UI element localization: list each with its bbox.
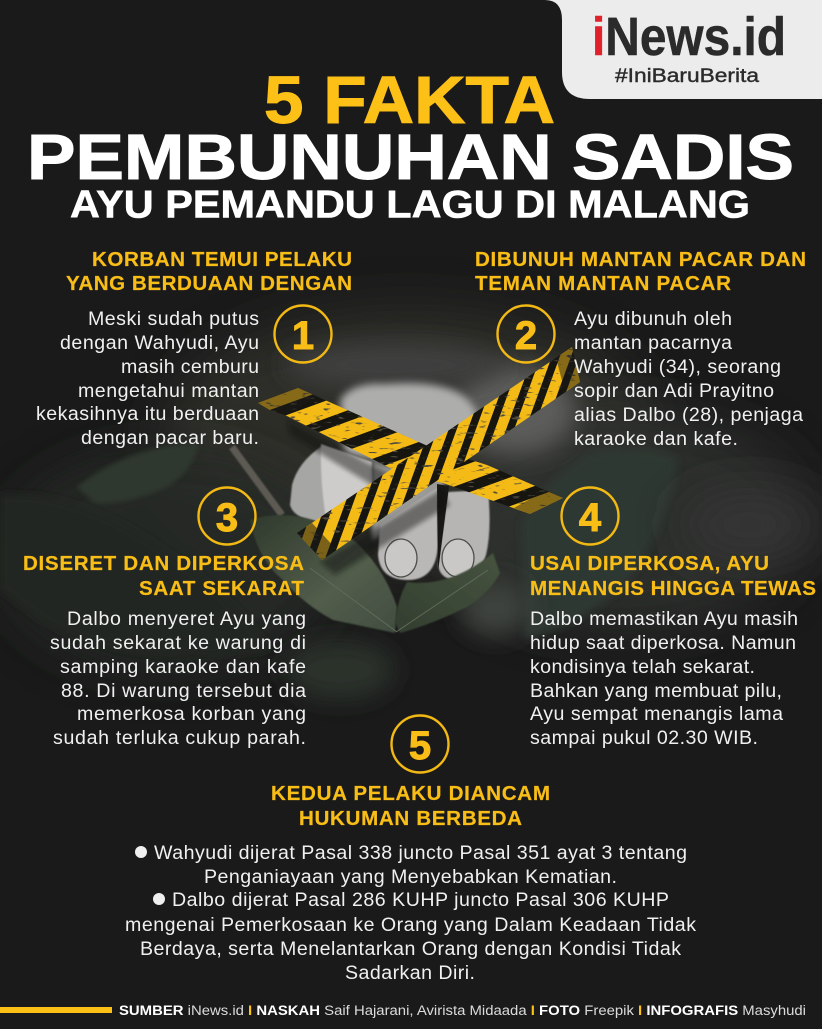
- heading 2: [475, 248, 806, 295]
- title: PEMBUNUHAN SADIS: [27, 121, 794, 193]
- fact 1: [36, 248, 352, 449]
- footer credits: SUMBER iNews.id I NASKAH Saif Hajarani, Avirista Midaada I FOTO Freepik I INFOGRAFIS Masyhudi: [119, 1003, 806, 1018]
- leaf: main right: [395, 553, 500, 633]
- hand: back of the hand: [340, 383, 480, 470]
- body 2: Wahyudi (34), seorang: [574, 356, 781, 378]
- body 4: kondisinya telah sekarat.: [530, 656, 755, 678]
- heading 5: KEDUA PELAKU DIANCAM: [271, 782, 550, 805]
- logo wordmark: iNews.id: [592, 7, 786, 67]
- body 2: alias Dalbo (28), penjaga: [574, 404, 803, 426]
- number badge 4: 4: [579, 496, 602, 540]
- body 4: [530, 608, 798, 749]
- number badge 3: [198, 488, 256, 544]
- hand: fingernails: [385, 539, 474, 577]
- body 3: sudah terluka cukup parah.: [53, 727, 306, 749]
- number badge 2: 2: [515, 314, 537, 358]
- fact 2: [475, 248, 806, 450]
- body 2: sopir dan Adi Prayitno: [574, 380, 774, 402]
- heading 5: [271, 782, 550, 830]
- number badge 4: [562, 488, 618, 544]
- body 2: Ayu dibunuh oleh: [574, 308, 732, 330]
- heading 1: [66, 248, 352, 295]
- body 1: mengetahui mantan: [78, 380, 259, 402]
- heading 1: KORBAN TEMUI PELAKU: [92, 248, 352, 271]
- tape: bottom-left to top-right: [297, 347, 580, 560]
- hand: folded fingers: [290, 446, 330, 522]
- heading 3: SAAT SEKARAT: [139, 577, 304, 600]
- body 3: [50, 608, 306, 749]
- fact 4: [530, 488, 816, 749]
- heading 2: TEMAN MANTAN PACAR: [475, 272, 731, 295]
- leaf: main left: [250, 515, 397, 633]
- body 5: mengenai Pemerkosaan ke Orang yang Dalam Keadaan Tidak: [125, 914, 696, 936]
- number badge 2: [498, 306, 554, 362]
- footer accent bar: [0, 1007, 112, 1013]
- body 5: [125, 842, 696, 984]
- body 1: [36, 308, 259, 449]
- blurred ambient foliage: [0, 310, 820, 700]
- tape: top-left to bottom-right: [258, 388, 563, 514]
- body 5: Dalbo dijerat Pasal 286 KUHP juncto Pasal 306 KUHP: [172, 889, 669, 911]
- photo: hand on leaves behind crime tape: [0, 310, 820, 700]
- body 3: samping karaoke dan kafe: [60, 656, 306, 678]
- body 3: Dalbo menyeret Ayu yang: [67, 608, 306, 630]
- logo hashtag: #IniBaruBerita: [615, 66, 760, 87]
- title: AYU PEMANDU LAGU DI MALANG: [70, 184, 750, 226]
- heading 2: DIBUNUH MANTAN PACAR DAN: [475, 248, 806, 271]
- heading 3: DISERET DAN DIPERKOSA: [23, 552, 304, 575]
- fact 3: [23, 488, 306, 749]
- body 5: Sadarkan Diri.: [345, 962, 475, 984]
- tape shadows: [287, 420, 450, 575]
- body 1: Meski sudah putus: [88, 308, 259, 330]
- title: 5 FAKTA: [264, 63, 555, 138]
- body 1: dengan Wahyudi, Ayu: [60, 332, 259, 354]
- body 3: sudah sekarat ke warung di: [50, 632, 306, 654]
- heading 1: YANG BERDUAAN DENGAN: [66, 272, 352, 295]
- stem: [232, 447, 282, 515]
- body 1: masih cemburu: [121, 356, 259, 378]
- body 3: memerkosa korban yang: [77, 703, 306, 725]
- logo panel: [545, 0, 822, 99]
- hand: fingertips: [378, 488, 438, 580]
- body 4: sampai pukul 02.30 WIB.: [530, 727, 758, 749]
- heading 3: [23, 552, 304, 600]
- body 5: Penganiayaan yang Menyebabkan Kematian.: [204, 866, 617, 888]
- number badge 3: 3: [216, 496, 238, 540]
- body 2: mantan pacarnya: [574, 332, 732, 354]
- body 3: 88. Di warung tersebut dia: [61, 680, 306, 702]
- heading 4: USAI DIPERKOSA, AYU: [530, 552, 769, 575]
- body 1: dengan pacar baru.: [81, 427, 259, 449]
- heading 4: [530, 552, 816, 600]
- body 5: Berdaya, serta Menelantarkan Orang dengan Kondisi Tidak: [140, 938, 681, 960]
- body 2: karaoke dan kafe.: [574, 428, 738, 450]
- body 4: Ayu sempat menangis lama: [530, 703, 783, 725]
- heading 5: HUKUMAN BERBEDA: [299, 807, 522, 830]
- fact 5: [125, 716, 696, 984]
- body 4: Dalbo memastikan Ayu masih: [530, 608, 798, 630]
- heading 4: MENANGIS HINGGA TEWAS: [530, 577, 816, 600]
- body 4: hidup saat diperkosa. Namun: [530, 632, 796, 654]
- number badge 5: [392, 716, 448, 772]
- title: [27, 63, 794, 226]
- body 1: kekasihnya itu berduaan: [36, 403, 259, 425]
- body 5: Wahyudi dijerat Pasal 338 juncto Pasal 351 ayat 3 tentang: [154, 842, 687, 864]
- body 4: Bahkan yang membuat pilu,: [530, 680, 782, 702]
- number badge 1: [274, 306, 332, 362]
- body 2: [574, 308, 803, 450]
- number badge 5: 5: [409, 724, 431, 768]
- number badge 1: 1: [292, 314, 314, 358]
